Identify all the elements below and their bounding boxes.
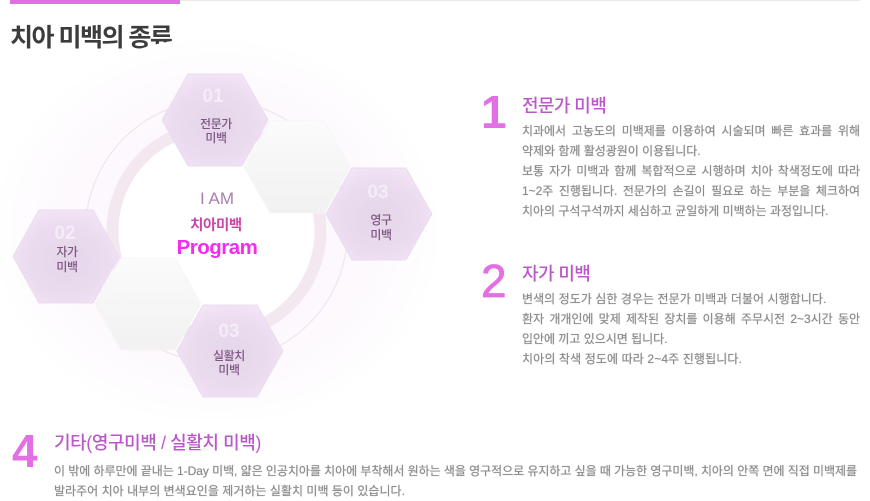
section 4: [12, 425, 857, 498]
section 1: [481, 86, 860, 218]
number 4: 4: [12, 425, 38, 477]
body text 4: 이 밖에 하루만에 끝내는 1-Day 미백, 얇은 인공치아를 치아에 부착해서 원하는 색을 영구적으로 유지하고 싶을 때 가능한 영구미백, 치아의 안쪽 면에 직접 미백제를: [54, 464, 857, 478]
heading 2: 자가 미백: [522, 264, 590, 284]
body text 1: 치아의 구석구석까지 세심하고 균일하게 미백하는 과정입니다.: [522, 204, 828, 218]
hexagon 01: [162, 74, 268, 166]
body text 2: 치아의 착색 정도에 따라 2~4주 진행됩니다.: [522, 352, 742, 366]
hexagon 03 right: 영구: [370, 213, 392, 227]
hexagon 03 bottom: [177, 305, 283, 397]
hexagon 01: 미백: [205, 131, 227, 145]
heading 4: 기타(영구미백 / 실활치 미백): [54, 433, 261, 453]
body text 1: 1~2주 진행됩니다. 전문가의 손길이 필요로 하는 부분을 체크하여: [522, 184, 860, 198]
body text 1: [522, 124, 860, 218]
body text 2: 입안에 끼고 있으시면 됩니다.: [522, 332, 668, 346]
body text 2: 환자 개개인에 맞제 제작된 장치를 이용해 주무시전 2~3시간 동안: [522, 312, 860, 326]
top rule: [10, 0, 860, 1]
number 1: 1: [481, 86, 507, 138]
hexagon 02: [13, 210, 119, 303]
body text 1: 치과에서 고농도의 미백제를 이용하여 시술되며 빠른 효과를 위해: [522, 124, 860, 138]
body text 1: 보통 자가 미백과 함께 복합적으로 시행하며 치아 착색정도에 따라: [522, 164, 860, 178]
hexagon 03 right: 03: [367, 182, 389, 203]
body text 4: 발라주어 치아 내부의 변색요인을 제거하는 실활치 미백 등이 있습니다.: [54, 484, 405, 498]
hexagon 03 right: [326, 168, 432, 260]
hexagon: blank lower: [95, 258, 201, 350]
hexagon 03 bottom: 실활치: [213, 349, 245, 363]
number 2: 2: [481, 255, 507, 307]
hexagon 01: 전문가: [200, 117, 232, 131]
background glow: [0, 37, 442, 427]
body text 2: 변색의 정도가 심한 경우는 전문가 미백과 더불어 시행합니다.: [522, 292, 826, 306]
inner ring: [112, 127, 320, 335]
outer thin ring: [86, 100, 348, 362]
body text 1: 약제와 함께 활성광원이 이용됩니다.: [522, 144, 701, 158]
hexagon 01: 01: [202, 86, 224, 107]
diagram: whitening program cycle: [12, 41, 432, 398]
center label: 치아미백: [190, 217, 242, 234]
body text 4: [54, 464, 857, 498]
center label: Program: [177, 236, 257, 259]
title: 치아 미백의 종류: [10, 24, 171, 52]
hexagon 03 bottom: 미백: [218, 363, 240, 377]
center label: [177, 189, 257, 259]
hexagon 02: 자가: [56, 245, 78, 259]
body text 2: [522, 292, 860, 366]
hexagon 02: 미백: [56, 260, 78, 274]
hexagon 03 bottom: 03: [218, 321, 240, 342]
section 2: [481, 255, 860, 366]
top accent bar: [10, 0, 180, 4]
center label: I AM: [200, 189, 234, 208]
hexagon 03 right: 미백: [370, 228, 392, 242]
hexagon 02: 02: [54, 223, 76, 244]
heading 1: 전문가 미백: [522, 96, 606, 116]
hexagon: blank upper: [244, 121, 350, 213]
